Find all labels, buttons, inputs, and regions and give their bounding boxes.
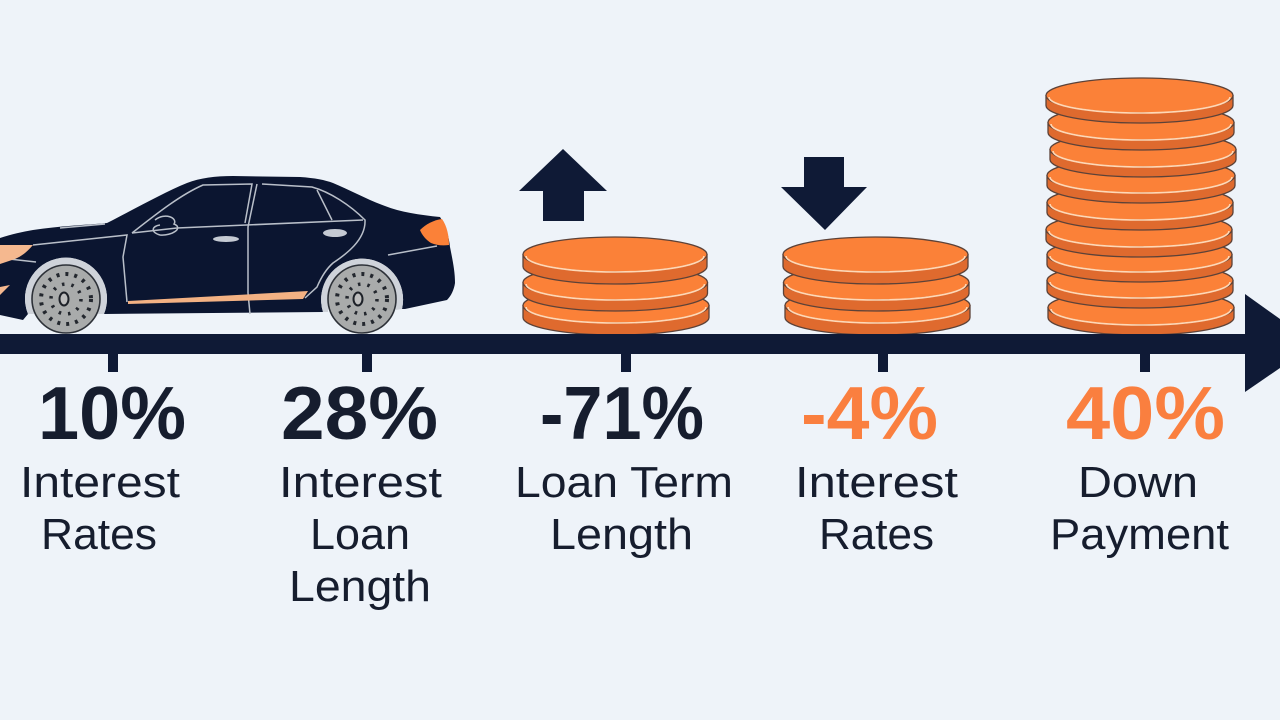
metric: -4% interest rates: Rates [819,510,934,559]
coin stack: loan term [523,237,709,335]
metric: 28% interest loan length: Interest [279,458,442,507]
metric: 40% down payment: Payment [1050,510,1229,559]
metric: -71% loan term length [515,371,733,559]
tail light [420,219,449,245]
wheel arch rings [25,258,403,314]
car body [0,176,455,320]
sill stripe [128,291,308,304]
metric: -4% interest rates [795,371,958,559]
metric: -71% loan term length: Length [550,510,693,559]
headlight [0,245,33,264]
icon: car [0,176,455,333]
metric: -71% loan term length: Loan Term [515,458,733,507]
metric: -71% loan term length: -71% [540,371,704,455]
metric: 40% down payment: 40% [1066,371,1225,455]
front marker [0,285,10,295]
metric: -4% interest rates: Interest [795,458,958,507]
metric: 28% interest loan length: 28% [281,371,438,455]
icon: down arrow [781,157,867,230]
metric: 40% down payment: Down [1078,458,1198,507]
door handles [213,229,347,242]
metric: 28% interest loan length [279,371,442,611]
coin stack: interest rates [783,237,970,335]
front wheel [328,265,396,333]
metric: -4% interest rates: -4% [801,371,938,455]
car outline details [0,184,437,314]
metric: 28% interest loan length: Length [289,562,431,611]
metric: 40% down payment [1050,371,1229,559]
metric: 10% interest rates [20,371,186,559]
metric: 10% interest rates: Interest [20,458,180,507]
metric: 10% interest rates: 10% [38,371,186,455]
icon: up arrow [519,149,607,221]
metric: 28% interest loan length: Loan [310,510,410,559]
rear wheel [32,265,100,333]
timeline axis arrow [0,294,1280,392]
metric: 10% interest rates: Rates [41,510,157,559]
coin stack: down payment [1046,78,1236,335]
